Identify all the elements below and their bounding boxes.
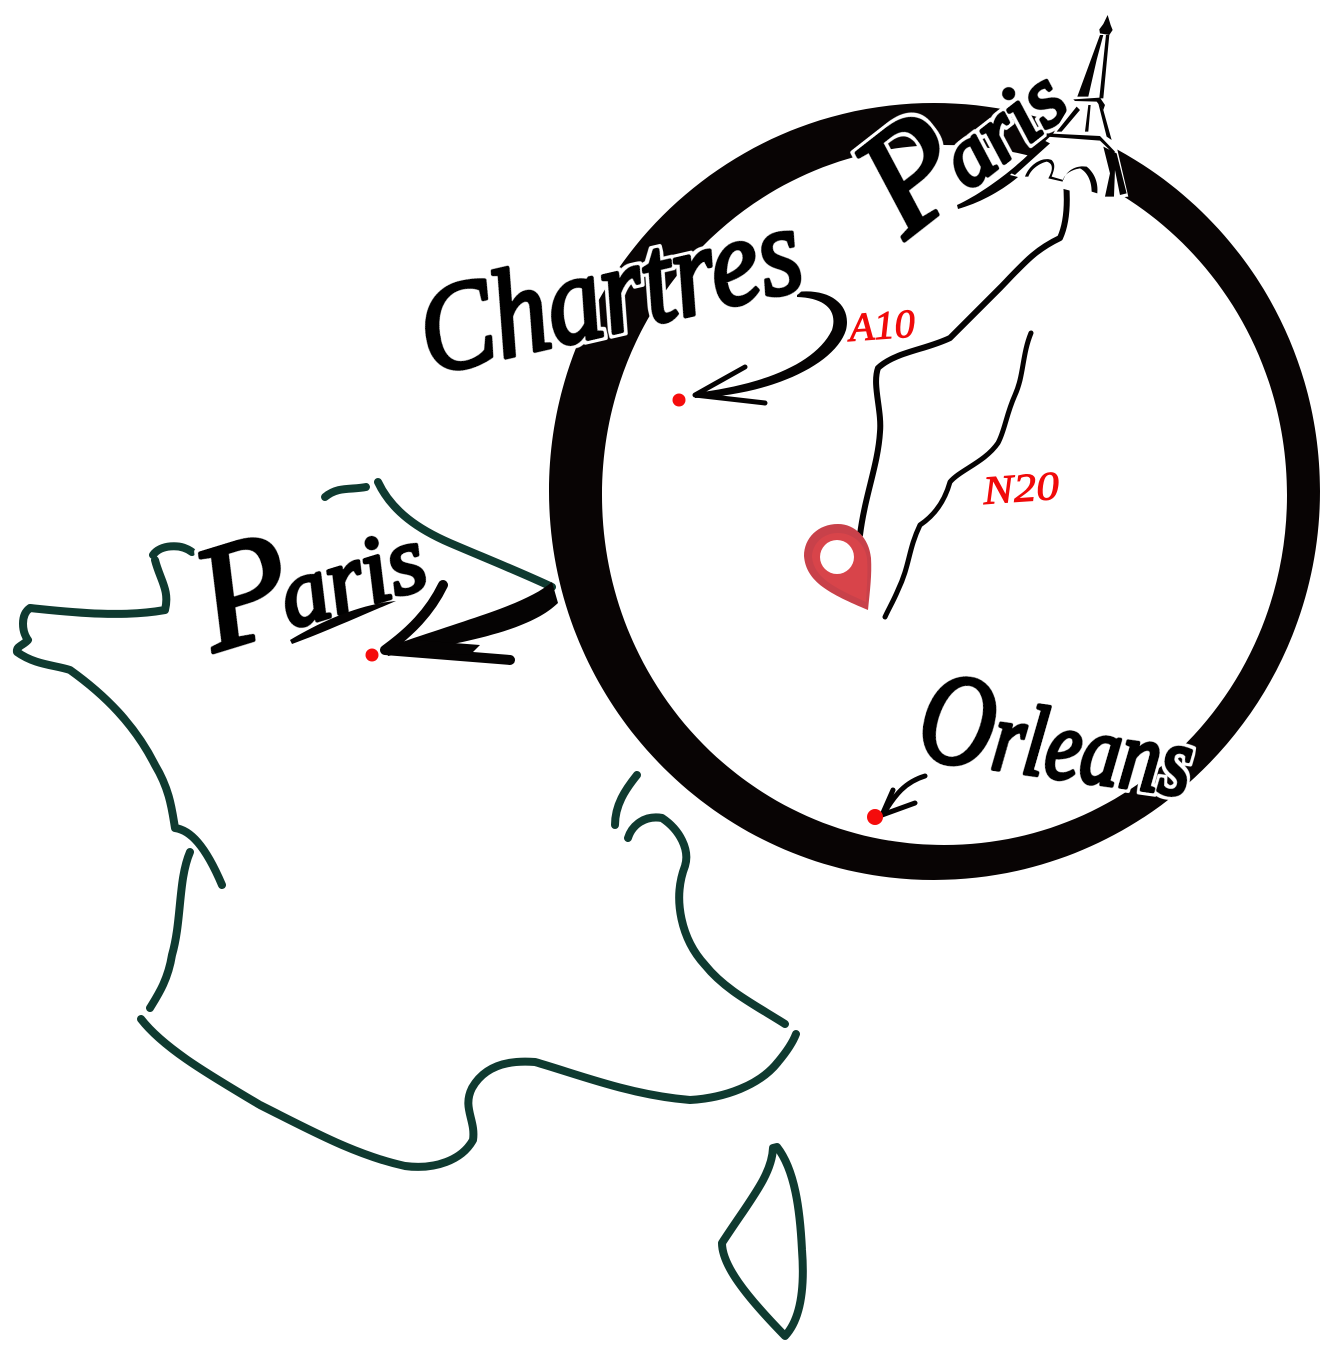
swash: Paris in circle [957,140,1046,209]
swash: Paris on map [290,601,396,644]
icon: location pin [804,524,871,610]
arrow: to Paris on map [385,582,558,660]
road: A10 [860,182,1067,535]
map: France outline [17,482,796,1167]
marker: Paris [366,648,378,662]
arrow: to Chartres [695,291,847,403]
ring: zoom circle [549,103,1320,880]
marker: Orleans [867,809,883,825]
label: road N20: N20 [980,463,1060,513]
label: road A10: A10 [844,300,916,350]
road: N20 [885,333,1031,617]
label: Chartres: Chartres [405,181,814,402]
icon: Eiffel Tower [1010,13,1128,199]
marker: Chartres [672,394,686,406]
label: Orleans: Orleans [911,644,1203,825]
label: Paris in circle: Paris [822,5,1092,267]
map: Corsica outline [722,1147,803,1336]
arrow: to Orleans [882,776,925,815]
label: Paris on map: Paris [174,458,441,684]
